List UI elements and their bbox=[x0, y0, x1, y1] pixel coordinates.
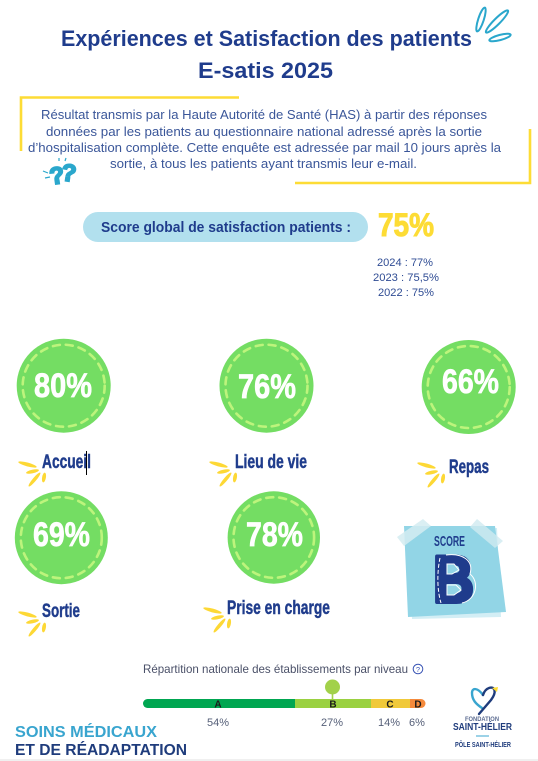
score: Repas bbox=[422, 340, 516, 434]
label: Repas bbox=[417, 457, 489, 489]
previous years scores bbox=[373, 257, 439, 299]
logo: Fondation Saint-Hélier bbox=[453, 687, 512, 749]
icon: help bbox=[413, 664, 423, 674]
title: E-satis 2025 bbox=[198, 58, 333, 83]
department name: SOINS MÉDICAUX bbox=[15, 722, 157, 741]
distribution bar: A bbox=[214, 700, 222, 710]
department name bbox=[15, 722, 187, 759]
score: Accueil: 80% bbox=[34, 367, 92, 405]
national distribution heading: Répartition nationale des établissements par niveau bbox=[143, 662, 408, 676]
distribution bar: B bbox=[329, 700, 337, 710]
marker: level B bbox=[325, 680, 340, 699]
score: Prise en charge bbox=[228, 491, 320, 584]
score: Prise en charge: 78% bbox=[246, 516, 303, 554]
intro text: d’hospitalisation complète. Cette enquête est adressée par mail 10 jours après la bbox=[28, 141, 501, 155]
score: Lieu de vie: 76% bbox=[238, 368, 296, 406]
label: Sortie bbox=[18, 601, 80, 638]
score: Repas: 66% bbox=[442, 363, 499, 401]
score: Lieu de vie bbox=[220, 339, 314, 433]
global score label: Score global de satisfaction patients : bbox=[101, 219, 351, 236]
icon: blue spray accent bbox=[474, 7, 511, 43]
sticky note: score B: B bbox=[433, 542, 474, 616]
icon: question marks bbox=[43, 158, 78, 191]
intro text: Résultat transmis par la Haute Autorité de Santé (HAS) à partir des réponses bbox=[41, 108, 487, 122]
distribution bar: C bbox=[386, 700, 394, 710]
label: Lieu de vie: Lieu de vie bbox=[235, 452, 307, 473]
intro text: sortie, à tous les patients ayant transmis leur e-mail. bbox=[110, 157, 417, 171]
previous years scores: 2024 : 77% bbox=[377, 257, 433, 269]
intro text: données par les patients au questionnaire national adressé après la sortie bbox=[46, 125, 482, 139]
distribution percentages: 27% bbox=[321, 717, 343, 729]
previous years scores: 2023 : 75,5% bbox=[373, 272, 439, 284]
intro text bbox=[28, 108, 501, 171]
title bbox=[61, 26, 472, 83]
icon: help: ? bbox=[416, 665, 420, 674]
distribution percentages bbox=[207, 717, 425, 729]
score: Accueil bbox=[17, 339, 111, 433]
intro text frame bbox=[21, 98, 530, 183]
global score value: 75% bbox=[378, 207, 434, 243]
logo: Fondation Saint-Hélier: PÔLE SAINT-HÉLIER bbox=[455, 740, 511, 749]
label: Sortie: Sortie bbox=[42, 601, 80, 622]
department name: ET DE RÉADAPTATION bbox=[15, 740, 187, 759]
sticky note: score B bbox=[397, 519, 506, 619]
distribution percentages: 14% bbox=[378, 717, 400, 729]
logo: Fondation Saint-Hélier: SAINT-HÉLIER bbox=[453, 720, 512, 733]
distribution percentages: 54% bbox=[207, 717, 229, 729]
distribution bar bbox=[143, 699, 426, 710]
title: Expériences et Satisfaction des patients bbox=[61, 26, 472, 51]
score: Sortie bbox=[15, 491, 108, 584]
global score label bbox=[83, 212, 368, 242]
label: Repas: Repas bbox=[449, 457, 489, 478]
logo: Fondation Saint-Hélier: FONDATION bbox=[465, 716, 499, 723]
label: Accueil bbox=[18, 451, 91, 488]
score: Sortie: 69% bbox=[33, 516, 90, 554]
label: Lieu de vie bbox=[209, 452, 307, 488]
distribution bar: D bbox=[414, 700, 422, 710]
label: Prise en charge: Prise en charge bbox=[227, 598, 330, 619]
label: Accueil: Accueil bbox=[42, 452, 91, 473]
previous years scores: 2022 : 75% bbox=[378, 287, 434, 299]
label: Prise en charge bbox=[203, 598, 330, 634]
sticky note: score B: SCORE bbox=[434, 533, 465, 550]
distribution percentages: 6% bbox=[409, 717, 425, 729]
icon: question marks: ? bbox=[48, 162, 66, 191]
icon: question marks: ? bbox=[60, 159, 78, 188]
